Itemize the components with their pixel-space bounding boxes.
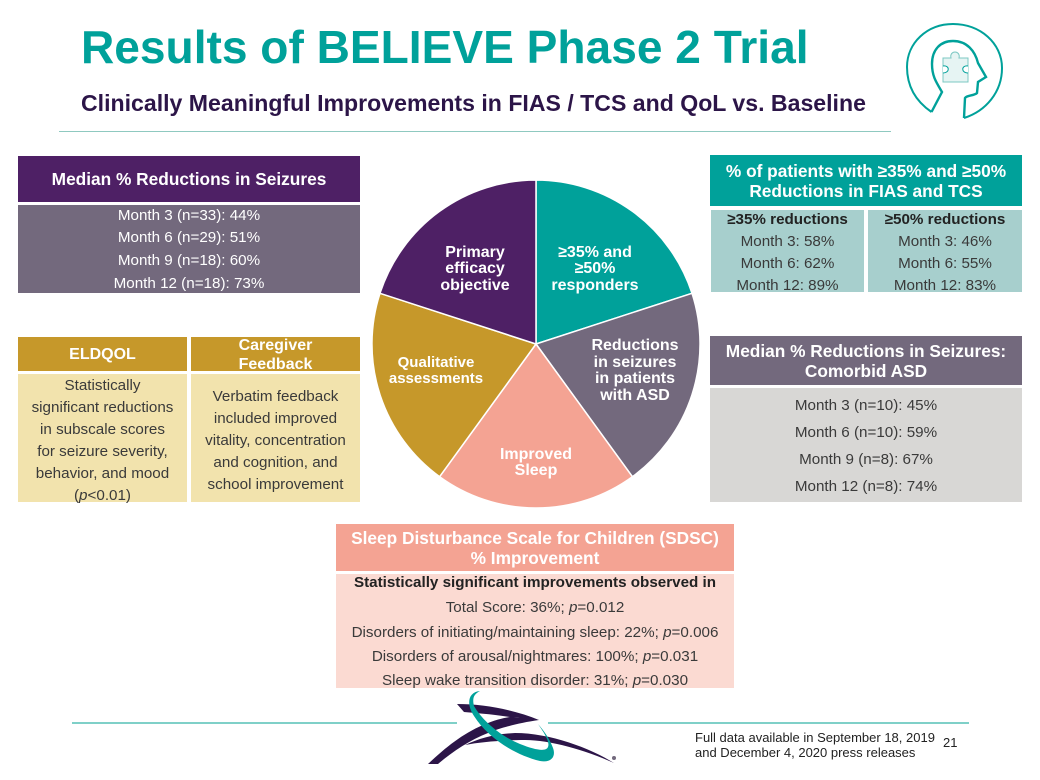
footnote: Full data available in September 18, 2019 [695, 730, 935, 745]
text: vitality, concentration [205, 432, 346, 449]
text: significant reductions [32, 399, 173, 416]
pie chart: Reductions [591, 337, 679, 354]
heading [710, 155, 1022, 206]
subtitle: Clinically Meaningful Improvements in FIAS / TCS and QoL vs. Baseline [81, 90, 866, 116]
50% column [868, 210, 1022, 292]
text: school improvement [208, 476, 343, 493]
panel: responders [710, 155, 1022, 294]
heading: Comorbid ASD [805, 360, 927, 380]
values [18, 205, 360, 293]
values: Sleep wake transition disorder: 31%; p=0.030 [382, 672, 688, 689]
35% column: ≥35% reductions [727, 211, 848, 228]
values: Total Score: 36%; p=0.012 [446, 599, 624, 616]
values: Month 6 (n=29): 51% [118, 229, 260, 246]
text: Statistically [65, 377, 140, 394]
values: Month 9 (n=8): 67% [799, 451, 933, 468]
pie chart: objective [440, 277, 510, 294]
text: and cognition, and [213, 454, 338, 471]
footnote: and December 4, 2020 press releases [695, 745, 915, 760]
text: in subscale scores [40, 421, 165, 438]
heading [336, 524, 734, 571]
pie chart [372, 180, 700, 508]
text: for seizure severity, [37, 443, 168, 460]
footnote [695, 730, 935, 760]
heading: Caregiver [239, 336, 312, 354]
panel: SDSC [336, 524, 734, 689]
panel: ELDQOL [18, 337, 187, 504]
heading: Reductions in FIAS and TCS [749, 180, 983, 200]
text: included improved [214, 410, 337, 427]
heading: Feedback [239, 356, 312, 372]
35% column: Month 6: 62% [741, 255, 834, 272]
values: Month 9 (n=18): 60% [118, 252, 260, 269]
values: Statistically significant improvements observed in [354, 574, 716, 591]
values: Month 3 (n=10): 45% [795, 397, 937, 414]
logo [428, 691, 616, 764]
50% column: Month 6: 55% [898, 255, 992, 272]
heading: % Improvement [471, 548, 599, 568]
heading [191, 337, 360, 371]
50% column: ≥50% reductions [885, 211, 1005, 228]
panel: caregiver feedback [191, 336, 360, 502]
text: behavior, and mood [36, 465, 169, 482]
35% column [711, 210, 864, 292]
text: (p<0.01) [74, 487, 131, 504]
pie chart: Primary [445, 244, 505, 261]
values [710, 388, 1022, 502]
heading: % of patients with ≥35% and ≥50% [726, 160, 1006, 180]
panel: comorbid ASD [710, 336, 1022, 502]
35% column: Month 3: 58% [741, 233, 834, 250]
heading [18, 156, 360, 202]
pie chart: Qualitative [398, 354, 474, 371]
heading [18, 337, 187, 371]
values: Month 12 (n=8): 74% [795, 478, 937, 495]
heading: Median % Reductions in Seizures [52, 169, 326, 189]
pie chart: assessments [389, 370, 483, 387]
page number: 21 [943, 735, 957, 750]
heading [710, 336, 1022, 385]
icon: head with puzzle piece [906, 23, 1003, 119]
values: Month 3 (n=33): 44% [118, 207, 260, 224]
50% column: Month 12: 83% [894, 277, 996, 294]
pie chart: responders [551, 277, 639, 294]
title: Results of BELIEVE Phase 2 Trial [81, 21, 809, 73]
text [191, 374, 360, 502]
values: Disorders of arousal/nightmares: 100%; p=0.031 [372, 648, 698, 665]
pie chart: Sleep [515, 462, 558, 479]
pie chart: in patients [595, 370, 675, 387]
panel: median reductions in seizures [18, 156, 360, 293]
pie chart: ≥35% and [558, 244, 632, 261]
values [336, 574, 734, 688]
text [18, 374, 187, 502]
pie chart: Improved [500, 446, 572, 463]
50% column: Month 3: 46% [898, 233, 992, 250]
values: Disorders of initiating/maintaining sleep: 22%; p=0.006 [352, 624, 718, 641]
values: Month 12 (n=18): 73% [114, 275, 264, 292]
heading: Sleep Disturbance Scale for Children (SDSC) [351, 528, 719, 548]
pie chart: ≥50% [575, 260, 615, 277]
pie chart: in seizures [594, 354, 676, 371]
pie chart: efficacy [445, 260, 505, 277]
heading: ELDQOL [69, 346, 136, 362]
35% column: Month 12: 89% [736, 277, 839, 294]
text: Verbatim feedback [213, 388, 338, 405]
values: Month 6 (n=10): 59% [795, 424, 937, 441]
pie chart: with ASD [599, 387, 670, 404]
heading: Median % Reductions in Seizures: [726, 340, 1006, 360]
